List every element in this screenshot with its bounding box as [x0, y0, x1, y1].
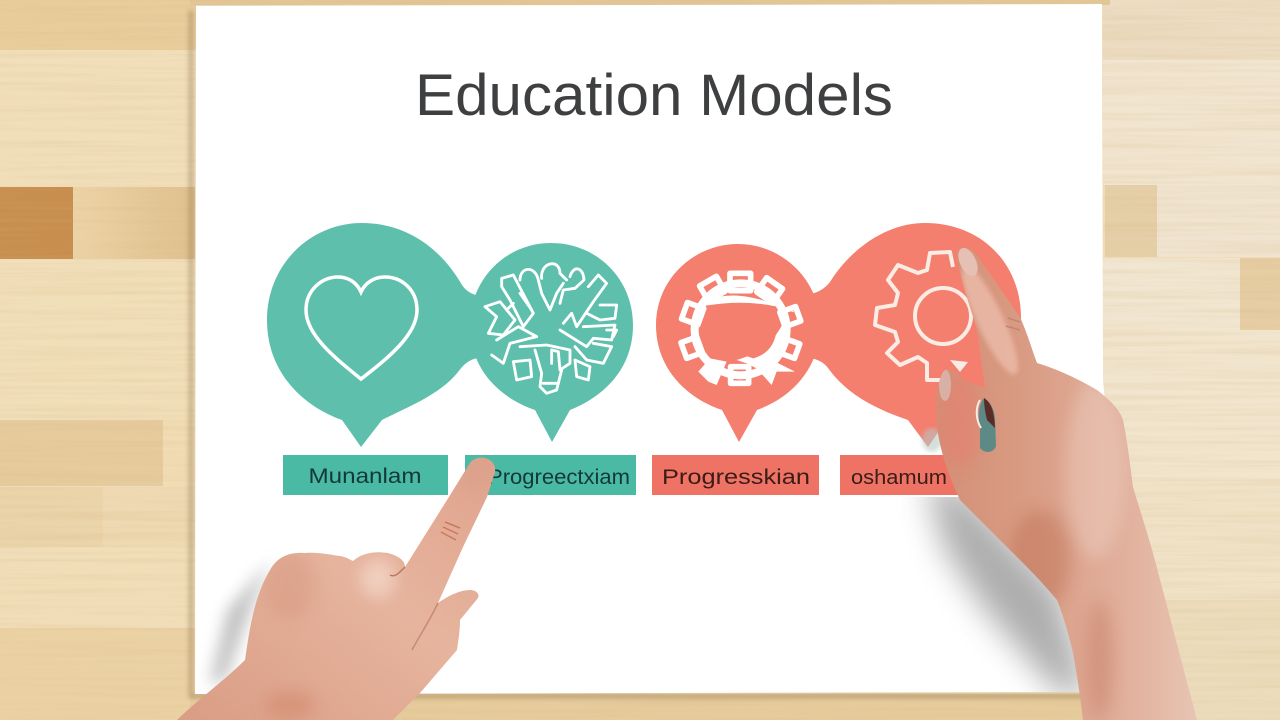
- title: Education Models: [415, 63, 893, 128]
- label: Munanlam: [283, 455, 448, 495]
- label: oshamum: [840, 455, 960, 495]
- icon: gear: [875, 252, 971, 380]
- paper sheet: [195, 4, 1130, 694]
- left hand pointing: [170, 450, 500, 720]
- right hand: [930, 240, 1200, 720]
- label: Progrecskiam: Progreectxiam: [488, 466, 630, 489]
- label: Progrecskiam: [465, 455, 636, 495]
- icon: gear with face: [681, 273, 801, 385]
- shadow above right-hand label: [922, 428, 942, 452]
- icon: people cluster: [485, 264, 617, 393]
- label: Progresskian: Progresskian: [662, 466, 810, 489]
- hand shadows on paper: [210, 480, 1090, 700]
- icon group: teal speech bubble with heart: [267, 223, 480, 447]
- icon: heart: [306, 277, 417, 379]
- icon group: coral speech bubble with gear and face: [656, 244, 820, 442]
- icon group: teal speech bubble with people cluster: [470, 243, 633, 442]
- icon group: coral speech bubble with gear: [810, 223, 1021, 447]
- label: Munanlam: Munanlam: [308, 465, 422, 488]
- label: Progresskian: [652, 455, 819, 495]
- paper drop shadow: [191, 10, 1085, 696]
- label: oshamum: oshamum: [851, 467, 947, 489]
- gap between fingers: [979, 398, 996, 452]
